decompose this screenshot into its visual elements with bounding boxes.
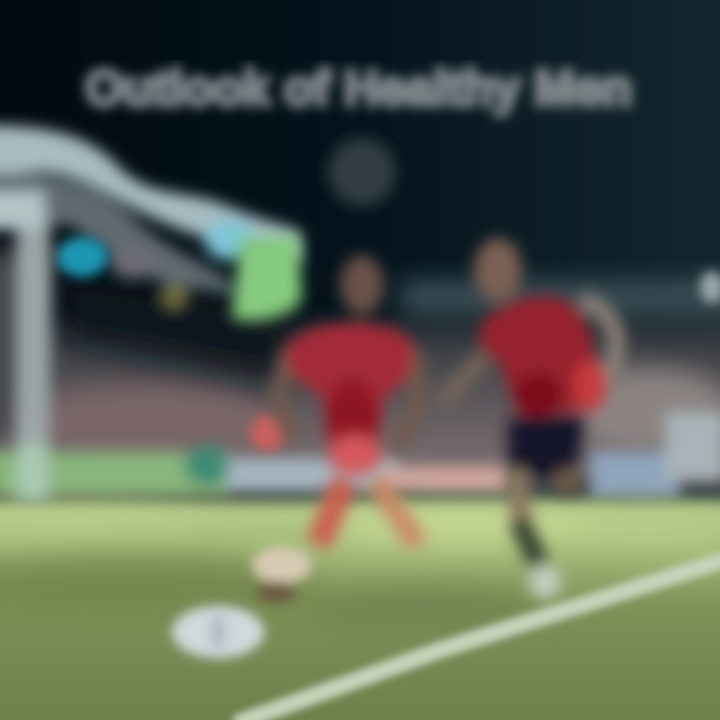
green screen — [232, 235, 302, 321]
pitch line — [235, 558, 720, 720]
blue screen — [56, 237, 108, 277]
dark stand under the roof — [65, 280, 295, 385]
right corner glint — [700, 271, 720, 303]
round emblem — [328, 138, 396, 206]
football — [172, 606, 264, 658]
stadium crowd band — [0, 250, 720, 485]
kicking foot — [252, 547, 312, 603]
goal post — [0, 190, 50, 500]
title text: Outlook of Healthy Men — [85, 60, 632, 116]
advertising boards — [0, 412, 720, 498]
background player in red — [250, 415, 286, 451]
player right — [442, 238, 616, 598]
player left — [278, 255, 420, 545]
grass shading — [0, 508, 720, 630]
pitch — [0, 500, 720, 720]
roof canopy — [0, 125, 302, 311]
